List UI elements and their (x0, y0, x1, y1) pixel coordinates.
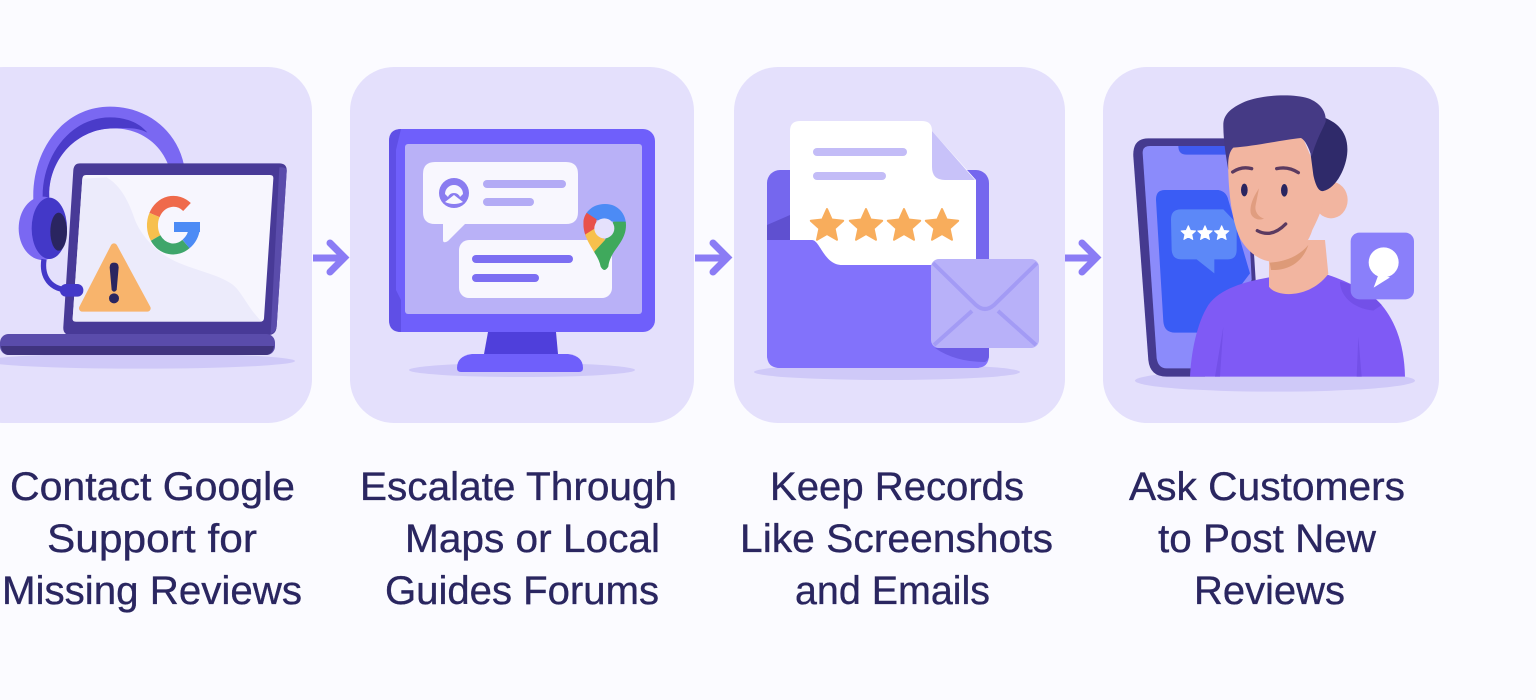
chat bubble lower (459, 240, 612, 298)
label: step 4: Ask Customers (1129, 465, 1405, 509)
illustration: monitor with chat (389, 129, 655, 377)
person (1190, 95, 1405, 377)
icon: chat badge (1351, 233, 1414, 299)
arrow 1 (313, 243, 344, 272)
panel: keep records (734, 67, 1065, 423)
panel background (0, 67, 312, 423)
label: step 2 (360, 465, 677, 613)
label: step 3: Like Screenshots (740, 517, 1053, 561)
label: step 2: Guides Forums (385, 569, 659, 613)
label: step 2: Escalate Through (360, 465, 677, 509)
panel background (1103, 67, 1439, 423)
icon: envelope (931, 259, 1039, 348)
label: step 3: Keep Records (770, 465, 1024, 509)
arrow 3 (1065, 243, 1096, 272)
label: step 3: and Emails (795, 569, 990, 613)
label: step 1: Missing Reviews (2, 569, 302, 613)
illustration: laptop with headset (0, 107, 295, 369)
chat bubble upper (423, 162, 578, 242)
illustration: folder with document (754, 121, 1039, 380)
panel: escalate through forums (350, 67, 694, 423)
label: step 1: Support for (47, 517, 257, 561)
label: step 4: Reviews (1194, 569, 1345, 613)
label: step 2: Maps or Local (405, 517, 660, 561)
icon: Google Maps pin (583, 204, 626, 270)
arrow 2 (695, 243, 728, 272)
phone with rating (1133, 138, 1256, 377)
icon: Google G (152, 201, 200, 249)
label: step 1: Contact Google (10, 465, 295, 509)
panel background (350, 67, 694, 423)
illustration: person with phone (1133, 95, 1415, 392)
icon: warning triangle (82, 247, 147, 308)
document with stars (790, 121, 976, 265)
label: step 3 (740, 465, 1053, 613)
label: step 1 (2, 465, 302, 613)
panel: contact support (0, 67, 312, 423)
panel background (734, 67, 1065, 423)
panel: ask customers (1103, 67, 1439, 423)
label: step 4: to Post New (1158, 517, 1376, 561)
label: step 4 (1129, 465, 1405, 613)
